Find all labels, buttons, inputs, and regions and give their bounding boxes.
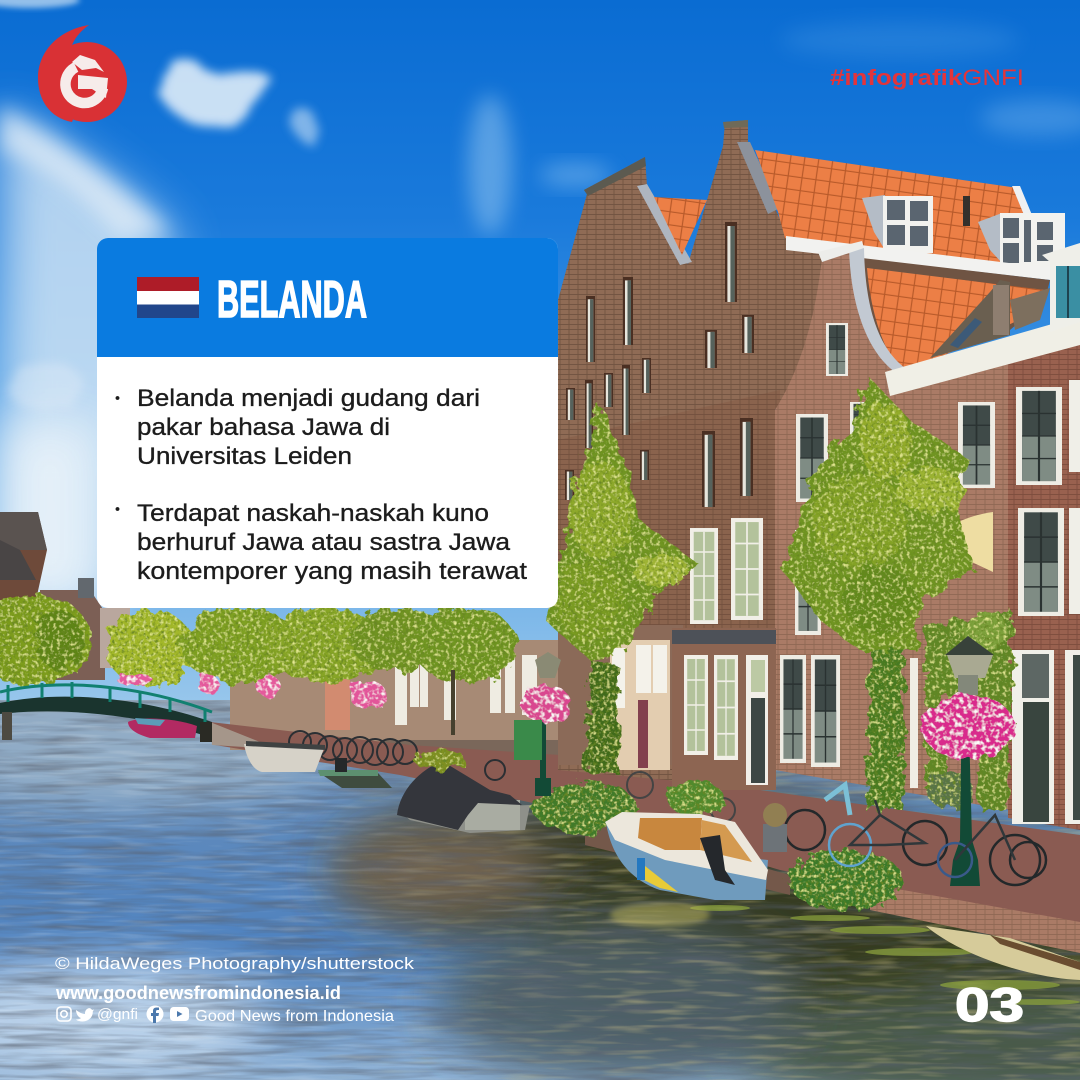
main white boat [605, 812, 768, 900]
panel: Belanda [97, 238, 558, 608]
bullet point 1 [116, 385, 480, 470]
icon: instagram [57, 1007, 71, 1021]
water [0, 700, 1080, 1080]
awning [925, 512, 993, 572]
hashtag: #infografik GNFI [830, 65, 1024, 90]
bushes [414, 750, 903, 910]
bullet point 2 [116, 500, 527, 585]
flag of the Netherlands [137, 277, 199, 318]
ivy wall [925, 610, 1012, 810]
upper facade windows [565, 222, 1080, 824]
hanging flowers distant [117, 674, 387, 709]
panel body [97, 238, 558, 608]
panel header [97, 238, 558, 357]
heading: BELANDA [217, 271, 367, 329]
bullet point 1: pakar bahasa Jawa di [137, 414, 390, 441]
ivy trunk right [865, 650, 905, 810]
flower baskets [521, 685, 1015, 759]
brand name: Good News from Indonesia [195, 1008, 394, 1025]
page number: 03 [955, 978, 1024, 1031]
far canal houses [230, 640, 580, 760]
street lamps [535, 636, 994, 886]
icon: facebook [146, 1006, 164, 1023]
bullet point 1: Universitas Leiden [137, 443, 352, 470]
orange roofs [654, 150, 1035, 268]
bullet point 2: kontemporer yang masih terawat [137, 558, 527, 585]
tree trunk [451, 670, 455, 735]
ivy trunk left [585, 660, 618, 772]
green tree right [782, 378, 975, 650]
canoe [926, 926, 1080, 980]
lower facade windows [558, 518, 840, 790]
website: www.goodnewsfromindonesia.id [55, 983, 341, 1003]
pink brick gabled house [775, 241, 1050, 810]
social row [57, 1006, 394, 1025]
parked bicycles row [289, 731, 735, 822]
bullet point 2: berhuruf Jawa atau sastra Jawa [137, 529, 511, 556]
logo garuda G [65, 55, 108, 103]
dormer windows [862, 195, 1065, 268]
dark brick warehouses [558, 120, 825, 790]
icon: youtube [170, 1007, 189, 1021]
distant buildings left [0, 512, 130, 680]
handle: @gnfi [97, 1006, 138, 1023]
small moored boats [128, 718, 392, 788]
sky [0, 0, 1080, 720]
bullet point 1: Belanda menjadi gudang dari [137, 385, 480, 412]
icon: twitter [76, 1008, 94, 1021]
green tree left [545, 405, 700, 660]
logo GNFI [38, 25, 127, 122]
logo red drop [38, 25, 127, 122]
clouds [7, 58, 320, 410]
green bin [514, 720, 542, 760]
red post planter [763, 803, 787, 852]
photo credit: © HildaWeges Photography/shutterstock [55, 954, 415, 973]
large bicycles [785, 785, 1046, 885]
white cornice [786, 236, 1050, 280]
right red brick house [885, 243, 1080, 830]
street and quay [210, 722, 1080, 953]
bullet point 2: Terdapat naskah-naskah kuno [137, 500, 489, 527]
distant tree row [0, 594, 517, 686]
canal bridge [0, 682, 212, 742]
covered boat [397, 761, 530, 833]
